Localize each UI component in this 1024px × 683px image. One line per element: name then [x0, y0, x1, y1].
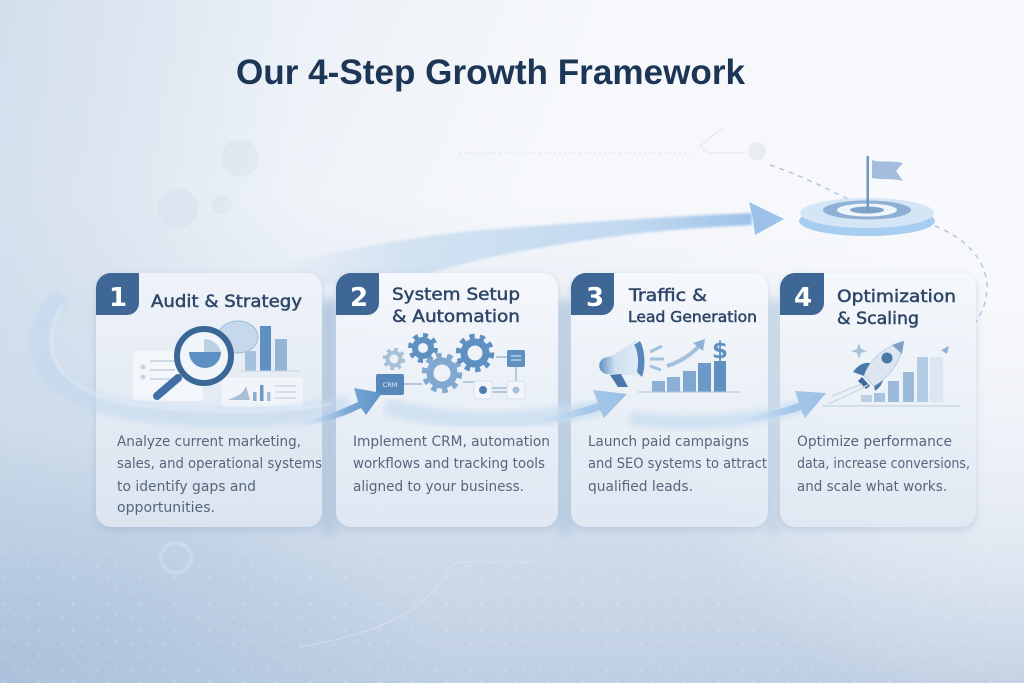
description: qualified leads. — [588, 479, 693, 495]
badge: step 2 — [336, 273, 379, 315]
description: Analyze current marketing, — [117, 434, 301, 450]
description — [588, 434, 767, 495]
panel: optimization and scaling — [780, 273, 976, 527]
description — [117, 434, 322, 516]
description: and scale what works. — [797, 479, 947, 495]
description — [353, 434, 550, 495]
heading: system setup and automation — [392, 285, 520, 327]
card 4 — [780, 273, 976, 527]
icon: magnifier over charts — [133, 321, 303, 407]
panel: system setup and automation — [336, 273, 558, 527]
upper growth swoosh with arrow — [270, 202, 852, 285]
badge: step 2: 2 — [350, 283, 368, 313]
icon: gears and CRM: CRM — [383, 381, 397, 389]
heading: optimization and scaling — [837, 287, 956, 329]
heading: system setup and automation: System Setup — [392, 285, 520, 305]
description: to identify gaps and — [117, 479, 256, 495]
description — [797, 434, 970, 495]
icon: megaphone and bars — [599, 338, 740, 392]
description: data, increase conversions, — [797, 456, 970, 472]
card 2 — [336, 273, 558, 527]
panel: traffic and lead generation — [571, 273, 768, 527]
description: aligned to your business. — [353, 479, 524, 495]
description: opportunities. — [117, 500, 215, 516]
heading: traffic and lead generation: Traffic & — [628, 286, 707, 306]
panel: audit and strategy — [96, 273, 322, 527]
icon: gears and CRM — [376, 336, 525, 399]
badge: step 4: 4 — [794, 283, 812, 313]
description: workflows and tracking tools — [353, 456, 545, 472]
card 1 — [96, 273, 322, 527]
icon: rocket and bars — [822, 341, 960, 406]
arrow: to step 3 — [530, 390, 627, 424]
icon: flag target — [799, 156, 935, 236]
decorative background gears and network — [24, 127, 766, 647]
badge: step 3: 3 — [586, 283, 604, 313]
description: Implement CRM, automation — [353, 434, 550, 450]
description: sales, and operational systems — [117, 456, 322, 472]
badge: step 1 — [96, 273, 139, 315]
heading: optimization and scaling: & Scaling — [837, 309, 919, 329]
icon: megaphone and bars: $ — [712, 338, 728, 364]
description: Optimize performance — [797, 434, 952, 450]
arrow: to step 2 — [300, 388, 382, 426]
badge: step 3 — [571, 273, 614, 315]
badge: step 4 — [780, 273, 824, 315]
badge: step 1: 1 — [109, 283, 127, 313]
card 3 — [571, 273, 768, 527]
heading: audit and strategy: Audit & Strategy — [151, 292, 302, 312]
heading: traffic and lead generation: Lead Generation — [628, 308, 757, 326]
lower flow swoosh and arrows — [40, 295, 826, 426]
title: Our 4-Step Growth Framework — [236, 53, 746, 92]
description: and SEO systems to attract — [588, 456, 767, 472]
description: Launch paid campaigns — [588, 434, 749, 450]
heading: system setup and automation: & Automation — [392, 307, 520, 327]
arrow: to step 4 — [735, 391, 826, 424]
heading: traffic and lead generation — [628, 286, 757, 326]
heading: optimization and scaling: Optimization — [837, 287, 956, 307]
dashed path to the flag target — [770, 165, 987, 346]
